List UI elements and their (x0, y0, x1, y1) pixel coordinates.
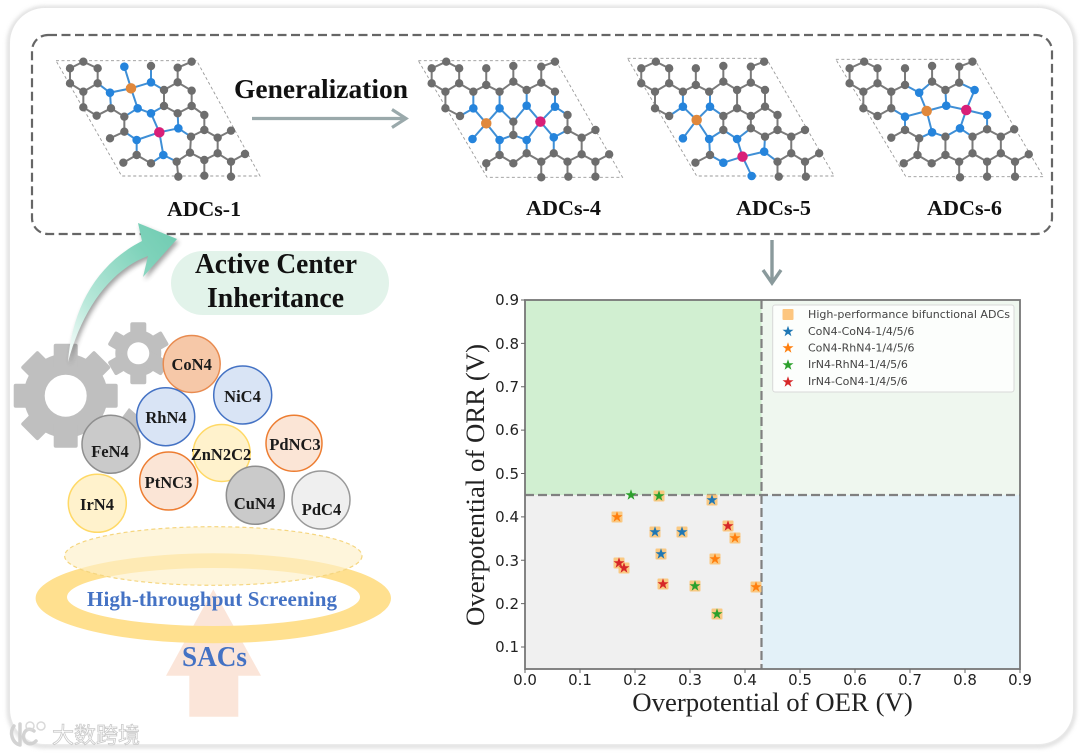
icon: hidden gear tooth (117, 408, 143, 440)
catalyst: PtNC3: PtNC3 (145, 473, 192, 492)
legend: CoN4-RhN4-1/4/5/6 (808, 342, 915, 354)
legend: IrN4-RhN4-1/4/5/6 (808, 358, 908, 371)
x tick labels: 0.9 (1008, 671, 1032, 689)
icon: large gear (14, 344, 118, 448)
x tick labels: 0.8 (953, 671, 977, 689)
panel: screening workflow (14, 223, 391, 717)
structure: ADCs-4 (418, 61, 623, 177)
legend: High-performance bifunctional ADCs (808, 308, 1010, 321)
catalyst: PdNC3: PdNC3 (269, 435, 321, 454)
arrow: SACs up (166, 589, 261, 717)
axis ticks (521, 300, 1020, 673)
structure: ADCs-1 (56, 61, 260, 177)
high-performance squares (612, 490, 762, 620)
arrow: down to chart (763, 240, 781, 283)
y tick labels: 0.3 (495, 552, 519, 570)
data stars: IrN4-CoN4 (614, 520, 734, 589)
y tick labels (495, 291, 519, 656)
pill: Active Center Inheritance: Inheritance (207, 283, 344, 314)
y tick labels: 0.9 (495, 291, 519, 309)
catalyst: FeN4: FeN4 (91, 442, 129, 461)
catalyst: IrN4 (68, 474, 126, 532)
catalyst: NiC4 (214, 366, 272, 424)
y tick labels: 0.6 (495, 421, 519, 439)
catalyst: NiC4: NiC4 (224, 387, 261, 406)
catalyst: RhN4: RhN4 (145, 408, 187, 427)
x tick labels: 0.2 (623, 671, 647, 689)
x tick labels: 0.7 (898, 671, 922, 689)
watermark: 大数跨境 (52, 723, 140, 748)
panel: ADCs structures (32, 35, 1052, 234)
catalyst: CoN4: CoN4 (172, 355, 212, 374)
catalyst: ZnN2C2 (191, 424, 251, 482)
x tick labels: 0.4 (733, 671, 757, 689)
catalyst: IrN4: IrN4 (80, 495, 114, 514)
catalyst: PdNC3 (266, 415, 322, 471)
catalyst: ZnN2C2: ZnN2C2 (191, 445, 251, 464)
legend: IrN4-CoN4-1/4/5/6 (808, 375, 908, 388)
arrow: generalization (252, 110, 406, 128)
pill: Active Center Inheritance (171, 249, 389, 315)
x tick labels: 0.1 (568, 671, 592, 689)
watermark (12, 722, 140, 748)
x tick labels (513, 671, 1032, 689)
data stars: IrN4-RhN4 (626, 489, 722, 619)
heading: Generalization: Generalization (234, 73, 408, 104)
catalyst: CoN4 (163, 336, 220, 392)
label: High-throughput Screening: High-throughput Screening (87, 587, 338, 611)
y tick labels: 0.5 (495, 465, 519, 483)
y tick labels: 0.8 (495, 335, 519, 353)
x tick labels: 0.3 (678, 671, 702, 689)
x tick labels: 0.6 (843, 671, 867, 689)
y tick labels: 0.7 (495, 378, 519, 396)
icon: small gear (107, 322, 169, 384)
y tick labels: 0.1 (495, 638, 519, 656)
y axis label: Overpotential of ORR (V) (460, 344, 490, 626)
ring: screening (36, 553, 391, 643)
label: SACs: SACs (182, 642, 247, 673)
structure: ADCs-6 (836, 59, 1043, 177)
data stars: CoN4-CoN4 (650, 494, 718, 559)
catalyst: FeN4 (82, 415, 140, 473)
y tick labels: 0.4 (495, 508, 519, 526)
catalyst: PdC4: PdC4 (302, 500, 341, 519)
ellipse: dashed filter (65, 527, 362, 585)
label: ADCs-1: ADCs-1 (167, 197, 241, 221)
chart: OER vs ORR overpotential (460, 291, 1032, 717)
label: ADCs-5: ADCs-5 (736, 196, 811, 220)
catalyst: RhN4 (137, 388, 195, 446)
pill: Active Center Inheritance: Active Center (195, 249, 357, 280)
x tick labels: 0.0 (513, 671, 537, 689)
catalyst: PdC4 (292, 471, 350, 529)
structure: ADCs-5 (628, 58, 834, 177)
label: ADCs-6: ADCs-6 (927, 196, 1002, 220)
catalyst: CuN4: CuN4 (234, 494, 275, 513)
catalyst: PtNC3 (140, 452, 198, 510)
y tick labels: 0.2 (495, 595, 519, 613)
catalyst: CuN4 (226, 466, 284, 524)
label: ADCs-4: ADCs-4 (526, 196, 601, 220)
x axis label: Overpotential of OER (V) (632, 687, 913, 717)
legend: CoN4-CoN4-1/4/5/6 (808, 325, 914, 338)
quadrants (525, 300, 1020, 669)
data stars: CoN4-RhN4 (612, 511, 762, 592)
legend (773, 305, 1014, 392)
x tick labels: 0.5 (788, 671, 812, 689)
arrow: inheritance curved (68, 223, 179, 365)
